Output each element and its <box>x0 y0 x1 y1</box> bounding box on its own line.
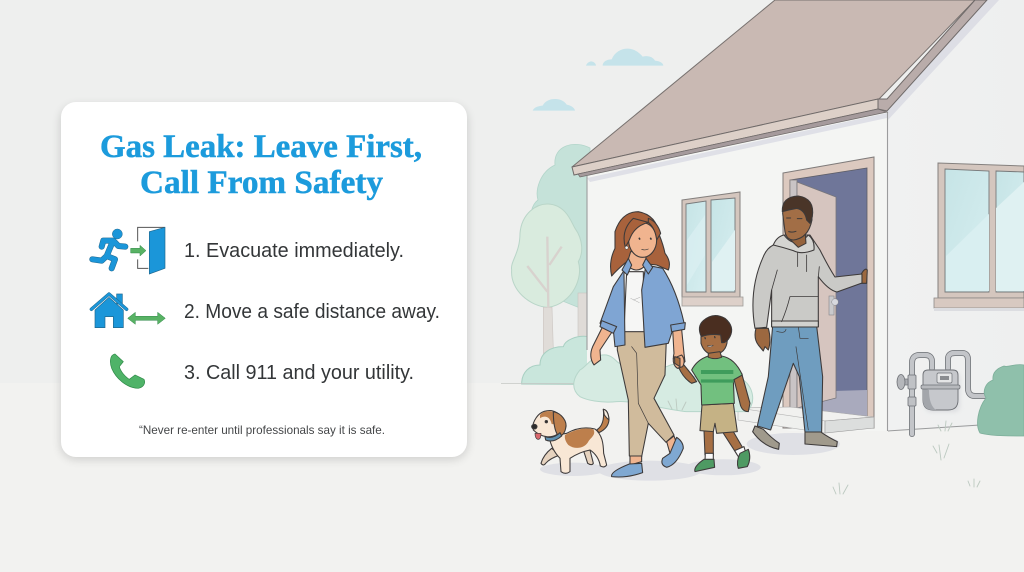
title: Gas Leak: Leave First, <box>100 129 422 165</box>
tongue <box>535 433 541 439</box>
collar <box>545 433 562 441</box>
neck and head <box>789 230 806 247</box>
step 2 text: 2. Move a safe distance away. <box>184 301 440 323</box>
head <box>533 411 562 437</box>
footnote: “Never re-enter until professionals say it is safe. <box>139 423 385 437</box>
gas meter and pipes <box>897 353 987 434</box>
icon: phone <box>110 354 145 388</box>
house right wall <box>887 0 1024 431</box>
horizon line <box>501 382 587 384</box>
small window <box>682 192 743 306</box>
hair back <box>611 212 669 276</box>
card shadow <box>61 106 467 459</box>
far legs <box>541 448 560 465</box>
pants <box>617 332 674 457</box>
bush right <box>978 365 1024 436</box>
icon: house with distance arrow <box>91 294 165 328</box>
house front wall <box>587 110 887 431</box>
shoes <box>612 463 643 477</box>
head <box>701 328 727 355</box>
step 3 text: 3. Call 911 and your utility. <box>184 362 414 384</box>
white shirt <box>624 272 644 332</box>
shorts <box>700 403 737 433</box>
feet <box>630 456 642 465</box>
arms <box>733 373 750 412</box>
woman <box>591 212 685 477</box>
tree behind house <box>531 144 590 338</box>
front step <box>738 407 874 421</box>
hand on door <box>861 269 867 283</box>
neck <box>627 250 646 270</box>
shoes <box>753 426 779 449</box>
info card <box>61 102 467 457</box>
large window <box>934 163 1024 311</box>
legs <box>704 430 713 455</box>
man <box>753 196 867 449</box>
dog <box>532 409 609 473</box>
roof <box>572 0 975 167</box>
people and dog <box>532 196 867 481</box>
jeans <box>757 326 823 433</box>
mid bush <box>574 355 753 412</box>
body <box>549 428 607 473</box>
right arm skin <box>673 329 685 368</box>
body patch <box>565 428 594 448</box>
open door <box>797 182 836 408</box>
title <box>100 129 422 201</box>
shoes <box>695 459 715 472</box>
jacket <box>600 258 685 347</box>
ground shadows <box>540 433 840 481</box>
hood <box>773 235 814 253</box>
doorway <box>738 157 874 433</box>
tail <box>597 409 609 433</box>
left hand <box>755 328 770 351</box>
hoodie <box>753 235 862 328</box>
left arm skin <box>591 327 613 365</box>
house <box>572 0 1024 433</box>
clouds <box>533 49 663 111</box>
step 1 text: 1. Evacuate immediately. <box>184 240 404 262</box>
face <box>629 223 657 257</box>
boy <box>678 315 750 472</box>
front tree and low bush <box>511 204 588 384</box>
title: Call From Safety <box>140 165 383 201</box>
held hand <box>673 355 684 368</box>
ground <box>0 383 1024 572</box>
icon: runner exiting door <box>92 227 165 274</box>
grass tufts <box>668 399 980 494</box>
tee <box>692 356 742 405</box>
